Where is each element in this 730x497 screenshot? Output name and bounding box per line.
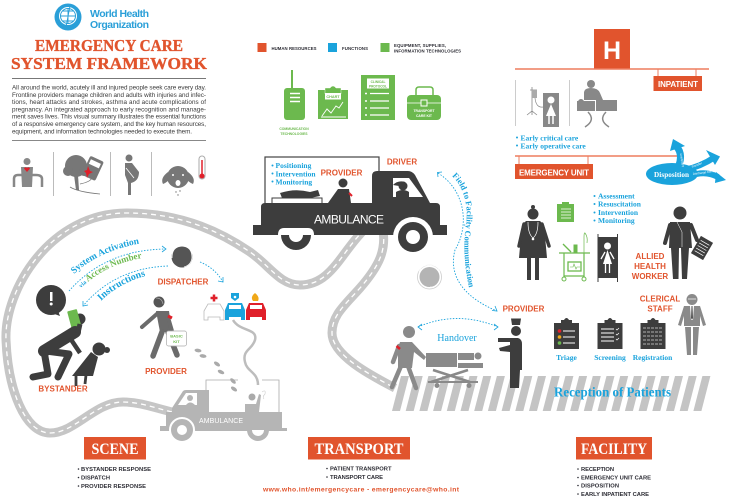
system activation arrows and labels: Instructions [96,272,145,301]
label: allied health worker: WORKER [632,272,668,281]
icon: surgeon and operating table [577,80,617,127]
ambulance: large transport truck [253,157,447,257]
legend [258,43,461,54]
early care list [516,134,586,150]
label: clerical staff: CLERICAL [640,294,680,304]
emergency unit functions list: Assessment [598,192,635,200]
icon: transport care kit [407,87,441,120]
icon: bystander with child [33,285,110,386]
disposition diagram [646,139,726,185]
system activation arrows and labels [68,240,224,306]
icon: communication technologies radio [279,70,309,136]
ambulance functions list: Intervention [276,170,316,178]
icon: dispatcher [172,246,192,268]
ambulance: large transport truck: AMBULANCE [314,212,384,226]
heading: facility [576,437,652,460]
heading: scene: SCENE [92,441,138,458]
intro text: Frontline providers manage children and adults with injuries and infec- [12,92,206,99]
icon: clinical protocol: CLINICAL [371,80,385,84]
intro text: of a responsive emergency care system, and the key human resources, [12,121,206,128]
label: clerical staff [640,294,680,314]
provider in ambulance [328,178,352,203]
scene list: DISPATCH [81,476,110,482]
label: dispatcher: DISPATCHER [158,278,209,286]
icon: clinical protocol [361,75,395,120]
label: bystander: BYSTANDER [38,384,88,394]
handover arrow and label: Handover [437,333,477,344]
label: provider and driver: PROVIDER [321,168,363,178]
icon: registration clipboard [640,318,666,349]
legend: INFORMATION TECHNOLOGIES [394,48,461,54]
WHO logo [54,4,149,31]
icon: child on stretcher [598,234,618,282]
scene list: PROVIDER RESPONSE [81,484,146,490]
heading: scene [84,437,146,460]
intro text: ment saves lives. This visual summary illustrates the essential functions [12,114,206,121]
facility list [577,467,651,497]
hospital sign [515,29,709,69]
WHO logo: World Health [90,8,149,20]
emergency unit functions list [594,192,642,225]
scene list [78,467,151,490]
WHO logo: Organization [90,19,149,31]
disposition diagram: Admission [679,153,685,168]
icon: road crash [63,155,104,194]
legend: FUNCTIONS [342,46,368,51]
system activation arrows and labels: via Access Number [79,254,142,288]
label: allied health worker: ALLIED [636,252,665,261]
ambulance functions list: Monitoring [276,178,312,186]
label: registration: Registration [633,353,673,362]
disposition diagram: Discharge home [693,169,715,176]
hospital sign: H [603,37,621,65]
intro text: equipment, and information technologies needed to execute them. [12,128,192,135]
icon: triage clipboard [554,318,579,349]
icon: response cars [204,293,266,320]
title: EMERGENCY CARE [35,36,183,55]
system activation arrows and labels: System Activation [70,240,140,274]
icon: provider with basic kit: KIT [173,339,180,344]
field to facility communication: Field to Facility Communication [452,172,473,288]
label: triage: Triage [556,353,578,362]
icon: chart [318,86,348,119]
facility list: EMERGENCY UNIT CARE [581,476,651,482]
emergency unit functions list: Resuscitation [598,200,642,208]
intro text: tions, heart attacks and strokes, asthma and acute complications of [12,99,206,106]
legend: EQUIPMENT, SUPPLIES, [394,43,446,48]
title: SYSTEM FRAMEWORK [11,54,207,73]
emergency unit functions list: Monitoring [598,216,635,225]
icon: dispatcher headset at facility [418,265,442,289]
icon: patient on stretcher [426,352,483,388]
transport list: PATIENT TRANSPORT [330,466,392,472]
icon: transport care kit: TRANSPORT [413,109,435,113]
provider footprints [194,348,238,392]
patient on stretcher [272,190,322,203]
road [6,213,395,433]
icon: communication technologies radio: COMMUNICATION [279,127,309,131]
emergency unit label [515,156,593,179]
ambulance functions list: Positioning [276,161,312,170]
icon: sick child with thermometer [162,156,205,196]
icon: screening clipboard [598,318,622,349]
label: screening: Screening [594,353,626,362]
transport list [326,466,392,481]
icon: provider receiving patient [498,318,522,388]
icon: child on IV drip [527,87,559,127]
label: allied health worker [632,252,668,281]
crosswalk [392,376,710,411]
icon: clerical staff [678,294,706,355]
website and email: www.who.int/emergencycare - emergencycare@who.int [262,486,460,494]
icon: clinical protocol: PROTOCOL [369,84,387,88]
icon: doctor [519,205,549,280]
inpatient label: INPATIENT [658,80,698,89]
icon: provider with basic kit [142,296,186,356]
handover arrow and label [418,318,498,344]
icon: provider with basic kit: BASIC [170,334,183,338]
icon: green clipboard [557,202,574,222]
label: provider at scene: PROVIDER [145,367,187,376]
icon: provider pushing stretcher [392,326,426,388]
transport list: TRANSPORT CARE [330,475,383,481]
ambulance: small at scene [160,380,287,442]
emergency unit functions list: Intervention [598,208,639,217]
icon: chart: CHART [326,95,340,99]
icon: heart attack person [14,158,42,187]
intro text: All around the world, acutely ill and injured people seek care every day. [12,84,206,92]
intro text [12,84,206,135]
early care list: Early critical care [520,134,579,142]
disposition diagram: Transfer [691,161,703,169]
ambulance: small at scene: AMBULANCE [199,418,243,425]
label: provider and driver [321,158,417,178]
label: clerical staff: STAFF [647,304,673,314]
icon: transport care kit: CARE KIT [416,114,433,118]
intro text: pregnancy. An integrated approach to early recognition and manage- [12,106,206,113]
scene list: BYSTANDER RESPONSE [81,467,151,473]
field to facility communication [437,172,498,312]
squiggly route from car to ambulance [233,320,258,385]
ambulance functions list [272,161,316,186]
icon: pregnant woman [125,154,139,195]
legend: HUMAN RESOURCES [272,46,317,51]
icon: green medical cart [559,233,590,281]
title [11,36,207,73]
emergency unit label: EMERGENCY UNIT [519,168,589,178]
facility list: RECEPTION [581,467,614,473]
label: provider at facility: PROVIDER [503,304,545,314]
early care list: Early operative care [520,142,586,150]
label: allied health worker: HEALTH [634,262,666,271]
disposition diagram: Disposition [654,171,689,179]
label: provider and driver: DRIVER [387,158,417,166]
heading: facility: FACILITY [581,441,647,458]
reception of patients: Reception of Patients [554,384,671,400]
icon: communication technologies radio: TECHNOLOGIES [280,132,308,136]
icon: allied health worker [665,206,713,279]
facility list: DISPOSITION [581,484,619,490]
inpatient label [654,69,702,91]
heading: transport: TRANSPORT [314,441,404,458]
